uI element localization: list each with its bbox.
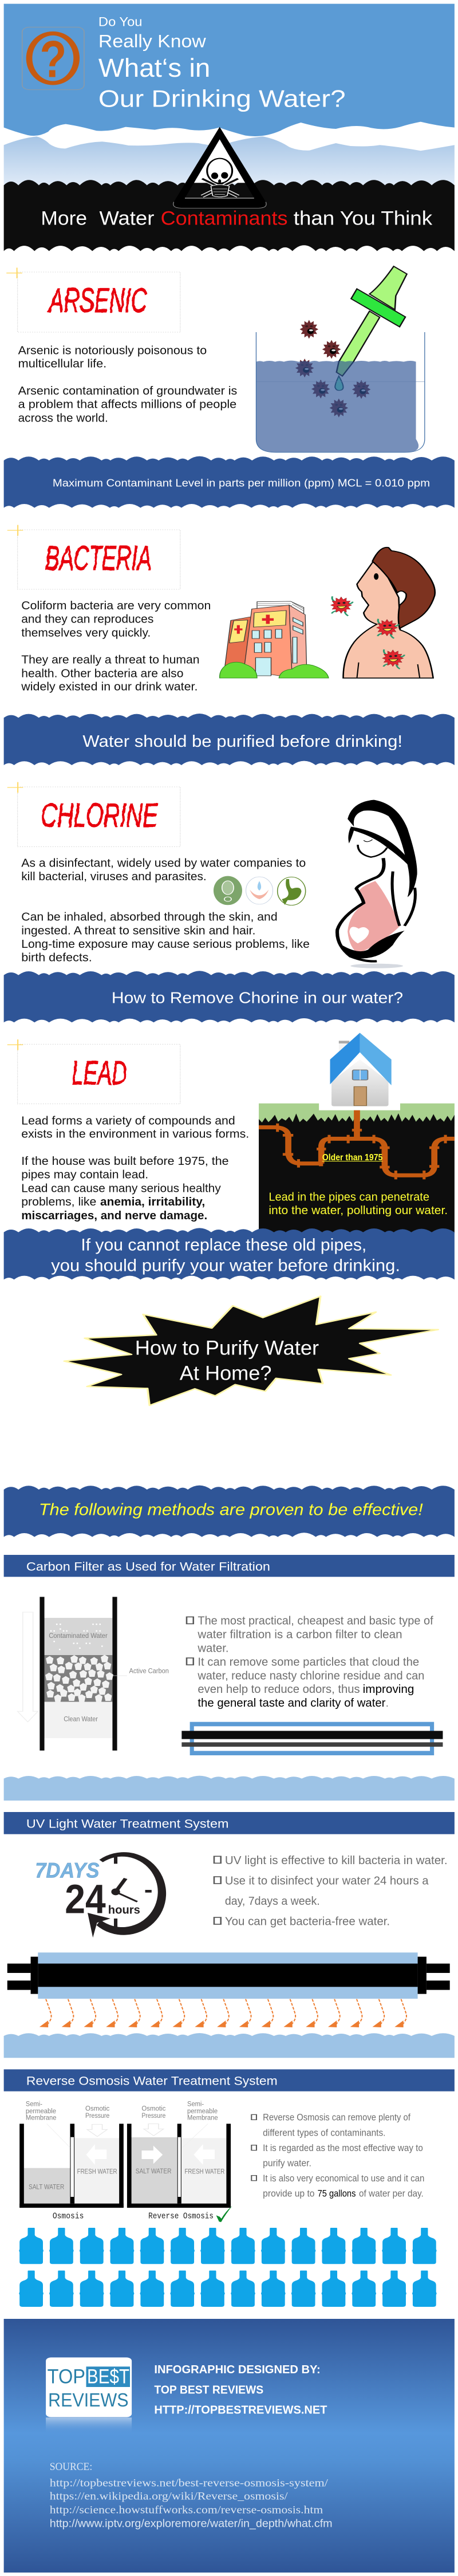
bacteria text: They are really a threat to human (21, 653, 199, 666)
arsenic text: a problem that affects millions of people (18, 399, 236, 411)
icon: 7 days 24 hours clock (35, 1852, 166, 1937)
osmosis tank diagram: permeable (26, 2108, 56, 2115)
subtitle: More (41, 207, 87, 229)
header blue background (4, 4, 455, 136)
lead heading box: LEAD (72, 1054, 127, 1092)
designer credit: INFOGRAPHIC DESIGNED BY: (154, 2364, 321, 2376)
starburst callout (64, 1296, 438, 1405)
osmosis tank diagram: permeable (187, 2108, 218, 2115)
carbon filter diagram: Active Carbon (129, 1668, 169, 1675)
icon: 7 days 24 hours clock: 7DAYS (35, 1858, 99, 1882)
water wave (4, 2033, 455, 2058)
sources: http://topbestreviews.net/best-reverse-osmosis-system/ (50, 2477, 328, 2489)
bacteria text: Coliform bacteria are very common (21, 600, 211, 612)
sources: SOURCE: (50, 2461, 92, 2473)
chlorine text: Can be inhaled, absorbed through the skin, and (21, 911, 278, 923)
uv bullet list: day, 7days a week. (225, 1895, 320, 1908)
bacteria text: widely existed in our drink water. (21, 681, 198, 693)
uv light arrows (40, 1999, 406, 2027)
subtitle: Contaminants (161, 207, 288, 229)
header section (4, 4, 455, 251)
sources: https://en.wikipedia.org/wiki/Reverse_osmosis/ (50, 2490, 288, 2502)
chlorine heading box (7, 782, 180, 846)
reverse osmosis bullet list: 75 gallons (318, 2188, 356, 2199)
panel: bacteria (4, 525, 455, 765)
caption: lead in pipes (269, 1191, 448, 1217)
bacteria text: themselves very quickly. (21, 627, 151, 639)
carbon bullet list: water. (198, 1642, 228, 1655)
bacteria text: health. Other bacteria are also (21, 667, 183, 680)
title: Really Know (98, 31, 206, 52)
osmosis tank diagram: SALT WATER (29, 2183, 64, 2191)
reverse osmosis heading: Reverse Osmosis Water Treatment System (26, 2074, 278, 2087)
starburst callout: At Home? (180, 1361, 271, 1384)
bacteria heading box (7, 525, 180, 589)
uv heading (4, 1812, 455, 1834)
lead text (21, 1114, 249, 1222)
carbon bullet list: even help to reduce odors, thus (198, 1683, 360, 1696)
logo: top best reviews: BE$T (87, 2365, 129, 2388)
icons: exposure routes (214, 876, 306, 905)
question mark icon: ? (40, 30, 66, 88)
osmosis tank diagram (19, 2101, 232, 2222)
chart: 75 gallons water bottles (19, 2228, 437, 2307)
panel: uv light (4, 1812, 455, 2058)
label: older than 1975 (322, 1153, 382, 1163)
icon: 7 days 24 hours clock: 24 (65, 1876, 106, 1922)
footer (4, 2319, 455, 2573)
carbon filter diagram: Clean Water (64, 1716, 98, 1723)
logo: top best reviews: TOP (48, 2365, 85, 2388)
arsenic heading box (6, 267, 180, 332)
arsenic text: across the world. (18, 412, 108, 424)
uv heading: UV Light Water Treatment System (26, 1817, 228, 1830)
bacteria text (21, 600, 211, 693)
reverse osmosis bullet list: provide up to (263, 2188, 314, 2199)
carbon heading (4, 1555, 455, 1577)
chlorine text: As a disinfectant, widely used by water companies to (21, 857, 306, 869)
icon: house (330, 1033, 392, 1106)
osmosis tank diagram: Osmotic (141, 2105, 165, 2113)
panel: reverse osmosis (4, 2069, 455, 2307)
banner: maximum contaminant level (4, 456, 455, 508)
lead text: problems, like (21, 1196, 96, 1208)
osmosis tank diagram: Membrane (187, 2114, 218, 2122)
lead text: pipes may contain lead. (21, 1168, 148, 1181)
osmosis tank diagram: Osmotic (85, 2105, 110, 2113)
reverse osmosis bullet list (251, 2112, 424, 2199)
designer credit: HTTP://TOPBESTREVIEWS.NET (154, 2404, 327, 2416)
title: Do You (98, 15, 142, 29)
lead text: exists in the environment in various forms. (21, 1128, 249, 1140)
osmosis tank diagram: Reverse Osmosis (148, 2211, 214, 2221)
osmosis tank diagram: Semi- (187, 2101, 204, 2108)
starburst callout: How to Purify Water (135, 1336, 319, 1359)
sources: http://science.howstuffworks.com/reverse-osmosis.htm (50, 2504, 323, 2516)
arsenic text: Arsenic is notoriously poisonous to (18, 344, 207, 357)
question mark icon (22, 27, 84, 90)
lead text: miscarriages, and nerve damage. (21, 1210, 207, 1222)
banner: how to remove chlorine (4, 971, 455, 1022)
icon: person with bacteria (331, 548, 435, 678)
osmosis tank diagram: Pressure (141, 2112, 165, 2120)
subtitle: Water (99, 207, 154, 229)
carbon bullet list: improving (363, 1683, 414, 1696)
osmosis tank diagram: FRESH WATER (184, 2168, 224, 2175)
osmosis tank diagram: Semi- (26, 2101, 42, 2108)
osmosis tank diagram: FRESH WATER (77, 2168, 117, 2175)
warning triangle with skull (173, 127, 266, 208)
arsenic heading box: ARSENIC (48, 282, 147, 320)
panel: lead (4, 1033, 455, 1279)
osmosis tank diagram: SALT WATER (136, 2168, 171, 2175)
lead text: Lead forms a variety of compounds and (21, 1114, 235, 1127)
label: older than 1975: Older than 1975 (322, 1153, 382, 1163)
carbon heading: Carbon Filter as Used for Water Filtration (26, 1559, 270, 1573)
lead text: anemia, irritability, (100, 1196, 205, 1208)
lead text: Lead can cause many serious healthy (21, 1183, 221, 1195)
reverse osmosis bullet list: purify water. (263, 2158, 311, 2169)
bacteria heading box: BACTERIA (45, 539, 152, 577)
chlorine text: ingested. A threat to sensitive skin and hair. (21, 924, 255, 937)
osmosis tank diagram: Pressure (85, 2112, 109, 2120)
icon: 7 days 24 hours clock: hours (108, 1903, 140, 1916)
banner: purify before drinking (4, 714, 455, 765)
osmosis tank diagram: Membrane (26, 2114, 56, 2122)
icon: pregnant woman (337, 800, 417, 968)
carbon filter diagram: Contaminated Water (49, 1632, 108, 1640)
water wave (4, 1776, 455, 1801)
chlorine text (21, 857, 310, 964)
banner: proven methods (4, 1486, 455, 1537)
bacteria text: and they can reproduces (21, 613, 153, 625)
arsenic text: multicellular life. (18, 358, 106, 370)
black wavy band (4, 179, 455, 251)
carbon filter cartridge (181, 1722, 443, 1755)
chlorine text: kill bacterial, viruses and parasites. (21, 871, 207, 883)
banner: replace old pipes (4, 1228, 455, 1279)
icon: hospital (220, 601, 329, 678)
chlorine text: Long-time exposure may cause serious problems, like (21, 938, 310, 951)
arsenic text (18, 344, 237, 424)
title (98, 15, 346, 112)
reverse osmosis heading (4, 2069, 455, 2091)
title: Our Drinking Water? (98, 86, 346, 112)
logo: top best reviews: REVIEWS (48, 2390, 128, 2411)
footer background (4, 2319, 455, 2573)
uv lamp tube (7, 1952, 450, 1999)
uv bullet list (214, 1854, 448, 1928)
carbon filter diagram (18, 1597, 169, 1751)
sources (50, 2461, 333, 2530)
panel: how to purify (4, 1296, 455, 1537)
title: What‘s in (98, 54, 210, 82)
arsenic text: Arsenic contamination of groundwater is (18, 385, 237, 397)
carbon bullet list (187, 1615, 433, 1710)
panel: carbon filter (4, 1555, 455, 1801)
chlorine text: birth defects. (21, 952, 92, 964)
carbon bullet list: . (386, 1697, 389, 1710)
panel: arsenic (4, 266, 455, 508)
icon: dropper in beaker with viruses (256, 266, 425, 452)
logo: top best reviews (46, 2357, 132, 2434)
underground pipes diagram (259, 1101, 455, 1233)
designer credit: TOP BEST REVIEWS (154, 2384, 263, 2396)
lead text: If the house was built before 1975, the (21, 1155, 228, 1168)
light blue wave (4, 136, 455, 185)
lead heading box (7, 1039, 180, 1104)
designer credit (154, 2364, 327, 2416)
osmosis tank diagram: Osmosis (53, 2211, 84, 2221)
panel: chlorine (4, 782, 455, 1022)
chlorine heading box: CHLORINE (41, 797, 158, 834)
subtitle (41, 207, 433, 229)
